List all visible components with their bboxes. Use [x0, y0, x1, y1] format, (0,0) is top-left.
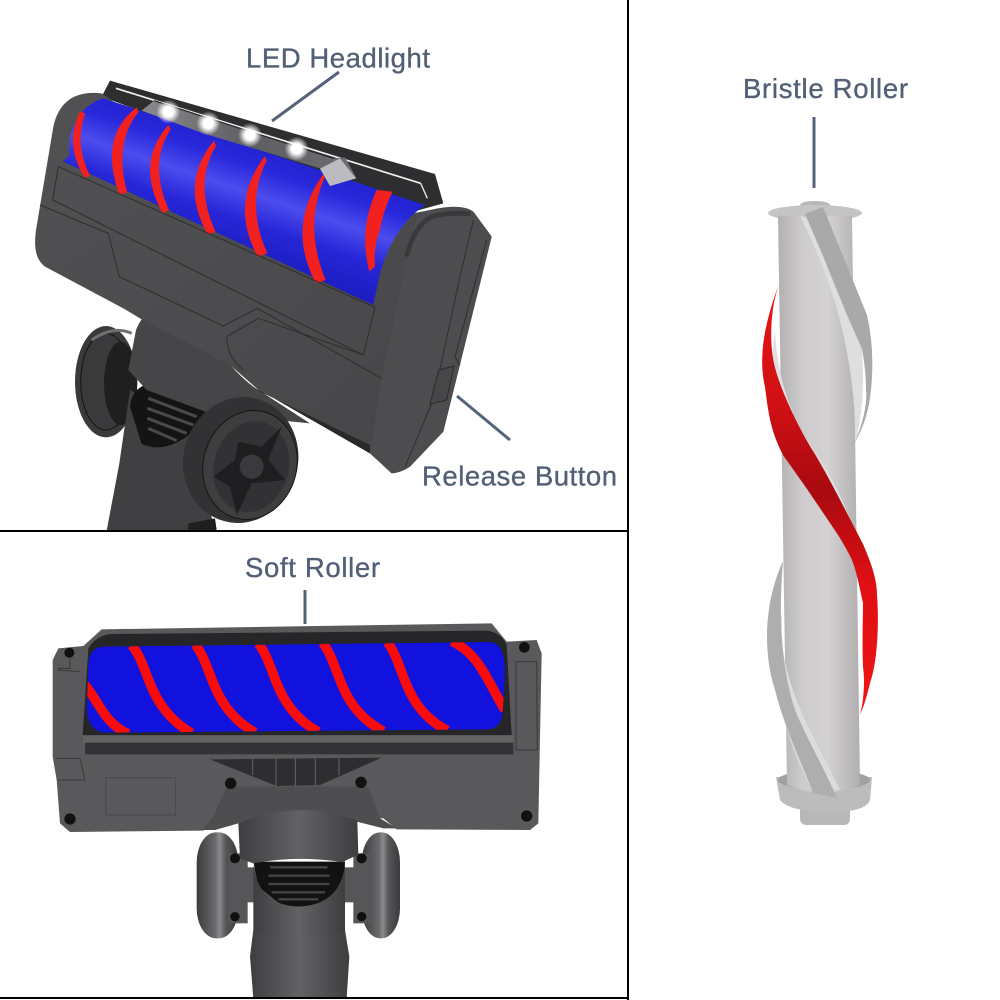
cylinder [778, 216, 860, 792]
soft roller [63, 98, 425, 305]
wheels [197, 832, 400, 938]
arrow: release button leader [457, 396, 510, 440]
top cover dark strip [83, 631, 512, 735]
rear wheel [75, 326, 137, 437]
panel: bristle roller [743, 73, 908, 825]
heading: Soft Roller: Soft Roller [245, 552, 380, 583]
LED light bar [142, 101, 357, 186]
arrow: soft roller leader [304, 590, 306, 624]
body shell [53, 623, 542, 832]
illustration: angled floor head [35, 81, 492, 536]
wheel star hub [213, 427, 285, 515]
side panels [57, 658, 537, 780]
wheel hubs and axles [228, 853, 370, 923]
right end cap [370, 207, 492, 473]
red bristle strip [762, 284, 878, 715]
illustration: bristle roller [762, 201, 878, 825]
red stripes [83, 641, 505, 734]
panel: soft roller front view [53, 552, 542, 998]
clip detail [188, 518, 217, 530]
underside shadow [257, 388, 370, 453]
illustration: front floor head [53, 623, 542, 998]
arrow: LED headlight leader [272, 72, 339, 121]
grey bristle top [805, 207, 872, 442]
front wheel [169, 384, 312, 536]
tube [250, 930, 349, 998]
neck [128, 308, 310, 423]
release button [430, 366, 454, 404]
heading: Bristle Roller: Bristle Roller [743, 73, 908, 104]
panel borders [0, 0, 628, 1000]
label plate [106, 778, 176, 815]
red fin shadow [772, 330, 870, 590]
screws [64, 642, 532, 921]
lower tube [107, 390, 215, 531]
grey bristle bottom [767, 561, 837, 798]
neck collar [238, 810, 358, 863]
bottom flange [776, 770, 872, 825]
heading: Release Button: Release Button [422, 460, 617, 492]
rear cover with highlight [102, 81, 443, 212]
LED lights [156, 100, 309, 161]
dark slot [85, 743, 513, 754]
blue roller [87, 642, 505, 733]
top flange [768, 201, 862, 221]
grey fin bottom [775, 610, 840, 790]
body panel lines [40, 167, 382, 378]
grey fin top [800, 216, 863, 445]
arrow: bristle roller leader [812, 117, 816, 188]
panel: LED headlight and release button nozzle [35, 42, 617, 536]
ribbed vent [210, 758, 382, 786]
spring [253, 862, 345, 907]
neck bracket [203, 787, 397, 830]
lower ledge [83, 736, 513, 743]
spring cavity [130, 385, 210, 447]
roller red stripes [73, 107, 393, 283]
main body shell [35, 93, 492, 473]
heading: LED Headlight: LED Headlight [246, 42, 430, 74]
lower neck bowl [253, 865, 345, 938]
